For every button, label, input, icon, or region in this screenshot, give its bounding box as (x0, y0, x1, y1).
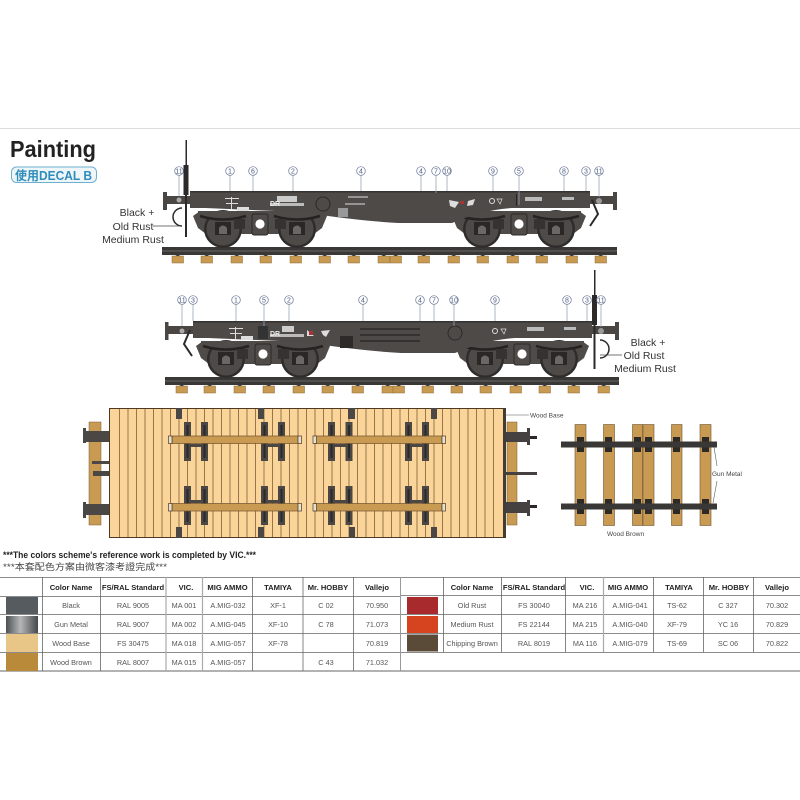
color table right: TS-62 (667, 601, 687, 610)
callout numbers 2: 8 (565, 298, 569, 304)
callout numbers 2: 3 (191, 298, 195, 304)
track 2 (165, 377, 619, 393)
color table right: MA 216 (573, 601, 597, 610)
callout numbers 2: 1 (234, 298, 238, 304)
callout numbers 2: 11 (178, 298, 186, 304)
color table right: Mr. HOBBY (709, 583, 749, 592)
color table right: Old Rust (458, 601, 486, 610)
color table right: MA 116 (573, 639, 597, 648)
color table left: MA 018 (172, 639, 196, 648)
paint note left: Old Rust (113, 221, 153, 233)
color table left (0, 577, 400, 671)
color table left: 70.950 (366, 601, 388, 610)
paint note left: Black + (120, 207, 154, 219)
color table right: SC 06 (718, 639, 738, 648)
callout numbers 1: 1 (228, 168, 232, 176)
paint note right (600, 337, 676, 375)
title: Painting (10, 136, 96, 162)
color table left: FS 30475 (117, 639, 149, 648)
beams (172, 436, 442, 511)
color table right: A.MIG-041 (612, 601, 648, 610)
color table left: 71.032 (366, 658, 388, 667)
color table right: XF-79 (667, 620, 687, 629)
top view of wagon (83, 408, 537, 538)
callout numbers 2: 4 (361, 298, 365, 304)
label: wood base (505, 412, 564, 420)
callout numbers 1: 2 (291, 168, 295, 176)
label: wood base: Wood Base (530, 412, 564, 420)
color table right: 70.822 (766, 639, 788, 648)
color table left: Black (62, 601, 80, 610)
color table left: C 43 (318, 658, 334, 667)
callout numbers 2: 3 (585, 298, 589, 304)
callout numbers 1: 7 (434, 168, 438, 176)
swatches left (6, 597, 38, 671)
track top view (561, 424, 717, 526)
deck (110, 408, 504, 538)
color table left: Mr. HOBBY (308, 583, 348, 592)
couplers (163, 192, 617, 210)
paint note left (102, 207, 179, 246)
color table right: FS/RAL Standard (503, 583, 566, 592)
color table left: MA 002 (172, 620, 196, 629)
color table right: Color Name (451, 583, 493, 592)
callout numbers 1: 4 (359, 168, 363, 176)
callout numbers 2: 10 (450, 298, 458, 304)
color table right: YC 16 (718, 620, 738, 629)
color table left: C 02 (318, 601, 334, 610)
color table left: Wood Brown (50, 658, 92, 667)
paint note right: Black + (631, 337, 665, 349)
color table left: Wood Base (52, 639, 90, 648)
callout numbers 1: 11 (595, 168, 603, 176)
callout numbers 2: 4 (418, 298, 422, 304)
color table right: Vallejo (765, 583, 789, 592)
label: gun metal (712, 447, 743, 503)
color table left: XF-10 (268, 620, 288, 629)
color table left: A.MIG-032 (210, 601, 246, 610)
decals (225, 197, 249, 211)
callout numbers 1: 3 (584, 168, 588, 176)
label: gun metal: Gun Metal (712, 471, 743, 478)
color table left: RAL 9005 (117, 601, 149, 610)
color table left: 71.073 (366, 620, 388, 629)
credit note: ***本套配色方案由微客漆考證完成*** (3, 561, 168, 572)
color table left: XF-78 (268, 639, 288, 648)
callout numbers 1: 6 (251, 168, 255, 176)
color table left: XF-1 (270, 601, 286, 610)
swatches right (407, 597, 438, 652)
callout numbers 1 (175, 167, 603, 205)
color table left: Color Name (50, 583, 92, 592)
color table right: A.MIG-079 (612, 639, 648, 648)
decal badge: 使用DECAL B (15, 168, 92, 183)
color table left: TAMIYA (264, 583, 292, 592)
wagon side view 1 (162, 140, 617, 263)
color table left: A.MIG-057 (210, 658, 246, 667)
callout numbers 1: 10 (443, 168, 451, 176)
color table right: FS 22144 (518, 620, 550, 629)
color table left: A.MIG-057 (210, 639, 246, 648)
callout numbers 1: 4 (419, 168, 423, 176)
color table left: VIC. (179, 583, 193, 592)
callout numbers 2 (178, 296, 605, 327)
callout numbers 1: 11 (175, 168, 183, 176)
paint note right: Old Rust (624, 350, 664, 362)
brackets (176, 408, 437, 538)
end frames (83, 408, 537, 538)
color table right: 70.302 (766, 601, 788, 610)
color table right: FS 30040 (518, 601, 550, 610)
color table right: C 327 (718, 601, 738, 610)
color table left: RAL 9007 (117, 620, 149, 629)
callout numbers 2: 11 (597, 298, 605, 304)
color table left: FS/RAL Standard (102, 583, 165, 592)
track 1 (162, 247, 617, 263)
color table right: TAMIYA (665, 583, 693, 592)
label: wood brown: Wood Brown (607, 531, 644, 538)
color table right: MA 215 (573, 620, 597, 629)
callout numbers 2: 9 (493, 298, 497, 304)
top divider line (0, 128, 800, 129)
wagon side view 1: DR (270, 201, 280, 208)
color table right: RAL 8019 (518, 639, 550, 648)
color table right: Chipping Brown (446, 639, 498, 648)
callout numbers 1: 9 (491, 168, 495, 176)
callout numbers 1: 5 (517, 168, 521, 176)
color table right (400, 577, 800, 671)
color table left: Gun Metal (54, 620, 88, 629)
color table right: TS-69 (667, 639, 687, 648)
color table right: 70.829 (766, 620, 788, 629)
callout numbers 2: 5 (262, 298, 266, 304)
wagon side view 2: DR (270, 331, 280, 338)
paint note left: Medium Rust (102, 234, 164, 246)
color table left: MIG AMMO (207, 583, 248, 592)
color table left: C 78 (318, 620, 334, 629)
callout numbers 1: 8 (562, 168, 566, 176)
credit note: ***The colors scheme's reference work is completed by VIC.*** (3, 550, 257, 560)
color table right: MIG AMMO (608, 583, 648, 592)
paint note right: Medium Rust (614, 363, 676, 375)
color table right: Medium Rust (451, 620, 493, 629)
color table left: A.MIG-045 (210, 620, 246, 629)
color table left: Vallejo (365, 583, 389, 592)
callout numbers 2: 7 (432, 298, 436, 304)
credit note (3, 550, 257, 572)
color table right: A.MIG-040 (612, 620, 648, 629)
color table left: MA 001 (172, 601, 196, 610)
color table right: VIC. (580, 583, 594, 592)
wagon side view 2 (165, 270, 619, 393)
color table left: 70.819 (366, 639, 388, 648)
color table left: RAL 8007 (117, 658, 149, 667)
callout numbers 2: 2 (287, 298, 291, 304)
color table left: MA 015 (172, 658, 196, 667)
